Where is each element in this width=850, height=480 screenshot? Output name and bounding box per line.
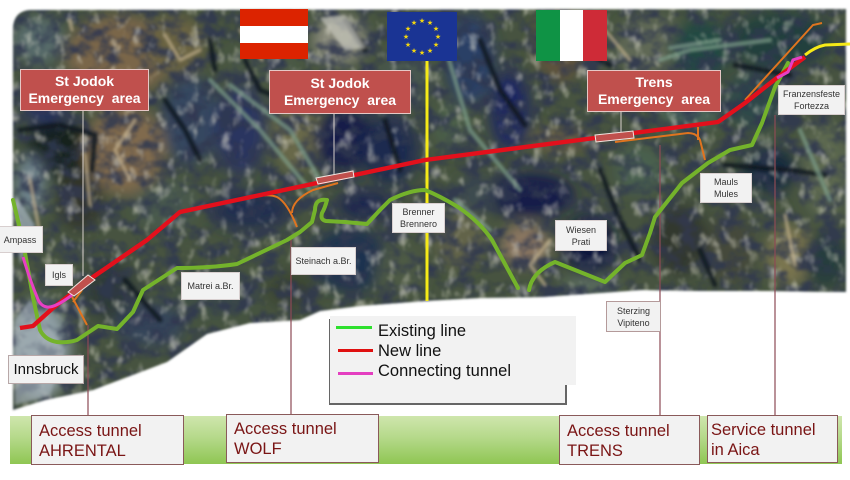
label: Sterzing: Vipiteno: [617, 318, 650, 328]
border line: east: [805, 44, 850, 55]
flag: European Union: ★: [427, 19, 433, 27]
label: Brenner: [392, 203, 445, 233]
legend swatch: existing line: [336, 326, 372, 329]
label: Matrei: [181, 272, 240, 300]
label: Franzensfeste: Franzensfeste: [783, 89, 840, 99]
label: Brenner: Brennero: [400, 219, 437, 229]
leader lines on map: [83, 110, 775, 415]
callout: Access tunnel Wolf: [226, 414, 379, 463]
heading: St Jodok emergency area left: Emergency area: [28, 90, 141, 106]
callout: Access tunnel Wolf: WOLF: [234, 440, 282, 458]
flag: European Union: ★: [419, 17, 425, 25]
callout: Access tunnel Wolf: Access tunnel: [234, 420, 337, 438]
label: Matrei: Matrei a.Br.: [187, 281, 234, 291]
label: Mauls: Mules: [714, 189, 738, 199]
heading: St Jodok emergency area middle: Emergency area: [284, 92, 396, 108]
label: Wiesen: Wiesen: [566, 224, 596, 234]
label: Franzensfeste: Fortezza: [794, 101, 829, 111]
heading: St Jodok emergency area middle: [269, 70, 411, 114]
callout: Access tunnel Trens: TRENS: [567, 442, 623, 460]
flag: European Union: ★: [405, 25, 411, 33]
flag: European Union: [387, 12, 457, 61]
label: Mauls: Mauls: [714, 177, 738, 187]
legend text: new line: New line: [378, 342, 441, 360]
label: Sterzing: Sterzing: [617, 306, 650, 316]
callout: Service tunnel in Aica: Service tunnel: [711, 421, 816, 439]
label: Brenner: Brenner: [402, 207, 435, 217]
callout: Access tunnel Ahrental: AHRENTAL: [39, 442, 126, 460]
heading: St Jodok emergency area middle: St Jodok: [310, 75, 370, 91]
label: Wiesen: Prati: [572, 236, 590, 246]
callout: Service tunnel in Aica: [707, 415, 838, 463]
flag: European Union: ★: [411, 47, 417, 55]
access tunnels orange: [70, 23, 822, 325]
flag: European Union: ★: [403, 33, 409, 41]
label: Steinach: [291, 247, 356, 275]
label: Wiesen: [555, 220, 607, 251]
label: Franzensfeste: [778, 85, 845, 115]
flag: Italy: [536, 10, 607, 61]
heading: Trens emergency area: [587, 70, 721, 112]
legend panel: [330, 316, 576, 385]
callout: Access tunnel Trens: [559, 415, 700, 465]
label: Ampass: Ampass: [4, 234, 36, 244]
label: Innsbruck: Innsbruck: [13, 360, 79, 378]
label: Innsbruck: [8, 355, 84, 384]
heading: St Jodok emergency area left: St Jodok: [55, 73, 114, 89]
flag: European Union: ★: [405, 41, 411, 49]
flag: Austria: [240, 9, 308, 59]
callout: Access tunnel Ahrental: [31, 415, 184, 465]
flag: European Union: ★: [433, 41, 439, 49]
legend: [329, 316, 576, 405]
legend text: existing line: Existing line: [378, 322, 466, 340]
existing line: [13, 63, 788, 342]
flag: European Union: ★: [411, 19, 417, 27]
flag: European Union: ★: [433, 25, 439, 33]
legend frame: [329, 319, 567, 405]
connecting tunnel: [23, 57, 802, 307]
callout: Access tunnel Ahrental: Access tunnel: [39, 422, 142, 440]
label: Igls: Igls: [52, 270, 66, 280]
heading: St Jodok emergency area left: [20, 69, 149, 111]
label: Sterzing: [606, 301, 661, 332]
label: Mauls: [700, 173, 752, 203]
heading: Trens emergency area: Trens: [635, 74, 673, 90]
label: Ampass: [0, 226, 43, 253]
label: Steinach: Steinach a.Br.: [295, 256, 352, 266]
flag: European Union: ★: [427, 47, 433, 55]
legend swatch: connecting tunnel: [338, 372, 373, 375]
green base bar: [10, 416, 842, 464]
callout: Access tunnel Trens: Access tunnel: [567, 422, 670, 440]
legend swatch: new line: [338, 349, 373, 352]
flag: European Union: ★: [419, 49, 425, 57]
label: Igls: [45, 264, 73, 286]
new line: [20, 57, 805, 328]
flag: European Union: ★: [435, 33, 441, 41]
callout: Service tunnel in Aica: in Aica: [711, 441, 760, 459]
heading: Trens emergency area: Emergency area: [598, 91, 710, 107]
border line: Brenner pass: [426, 58, 428, 301]
legend text: connecting tunnel: Connecting tunnel: [378, 362, 511, 380]
emergency area markers: [68, 131, 634, 296]
